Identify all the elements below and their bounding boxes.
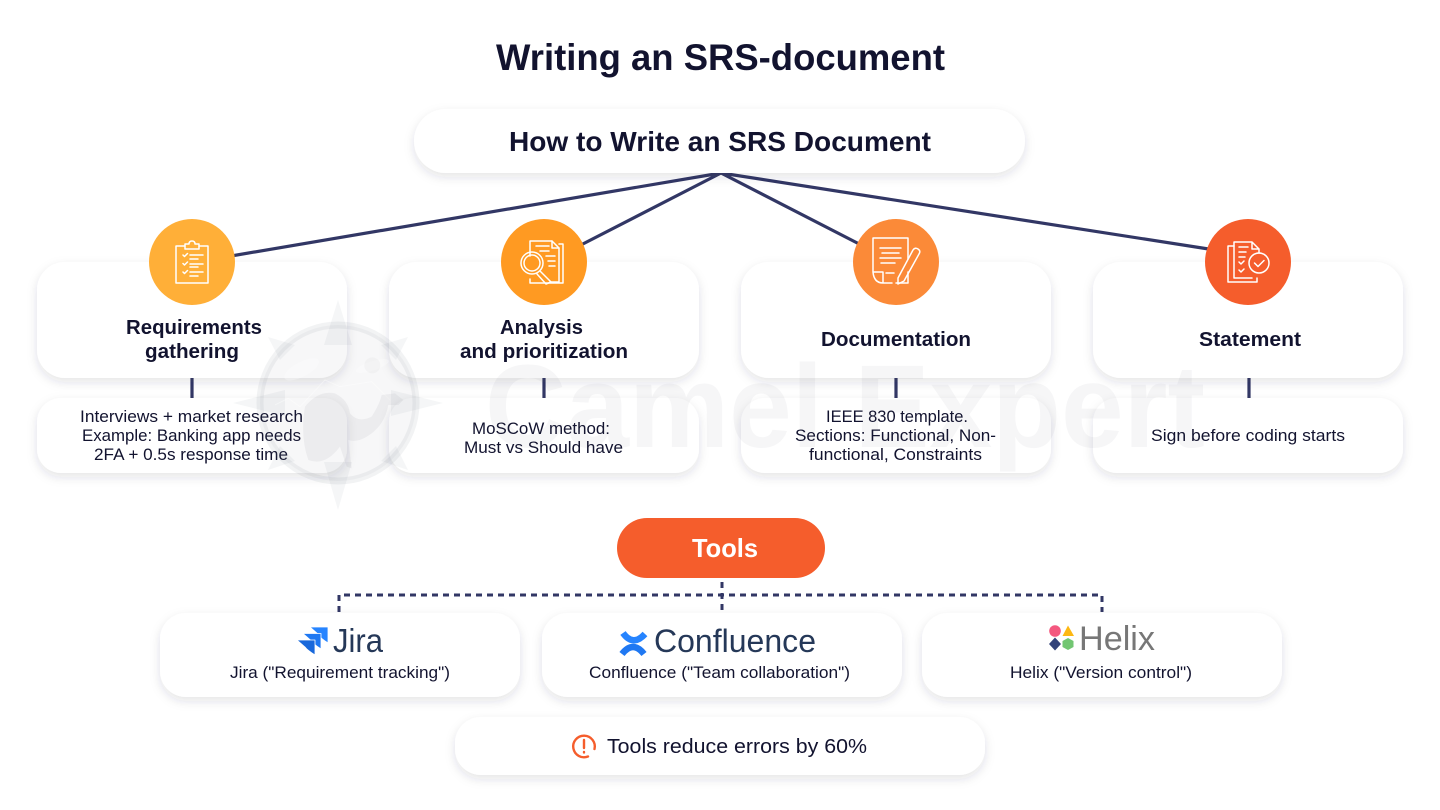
heading: requirements gathering: gathering [145, 341, 239, 363]
icon: confluence logo [622, 633, 645, 654]
callout text: Tools reduce errors by 60% [607, 736, 867, 758]
tools pill: Tools [692, 533, 758, 563]
watermark: compass emblem [233, 300, 443, 510]
connector lines from main heading to steps [225, 173, 1215, 257]
text: requirements details: 2FA + 0.5s response time [94, 446, 288, 464]
text: confluence caption: Confluence ("Team collaboration") [589, 664, 850, 682]
text: helix caption: Helix ("Version control") [1010, 664, 1192, 682]
heading: analysis and prioritization: Analysis [500, 317, 583, 339]
heading: analysis and prioritization [460, 317, 628, 363]
heading: requirements gathering: Requirements [126, 317, 262, 339]
text: requirements details: Interviews + market research [80, 408, 303, 426]
tools pill [617, 518, 825, 578]
text: jira caption: Jira ("Requirement tracking") [230, 664, 450, 682]
icon: signed document [1205, 219, 1291, 305]
text: requirements details: Example: Banking app needs [82, 427, 301, 445]
text: requirements details [80, 408, 303, 464]
icon: document with pencil [853, 219, 939, 305]
panel: analysis and prioritization [389, 219, 699, 473]
main heading pill [414, 109, 1025, 173]
main heading pill: How to Write an SRS Document [509, 126, 931, 157]
icon: jira logo [297, 627, 328, 655]
text: analysis details: Must vs Should have [464, 439, 623, 457]
icon: alert [573, 736, 595, 757]
callout [455, 717, 985, 775]
watermark [233, 300, 1205, 510]
text: documentation details: IEEE 830 template. [826, 408, 968, 426]
step connectors [192, 376, 1249, 400]
logo text: confluence: Confluence [654, 623, 816, 659]
panel: documentation [741, 219, 1051, 473]
heading: requirements gathering [126, 317, 262, 363]
dashed tool connectors [339, 582, 1102, 612]
icon: document with magnifier [501, 219, 587, 305]
text: documentation details: functional, Constraints [809, 446, 982, 464]
icon: helix logo [1049, 625, 1074, 650]
text: documentation details [795, 408, 996, 464]
logo text: jira: Jira [333, 622, 384, 659]
text: statement details: Sign before coding starts [1151, 427, 1345, 445]
logo text: helix: Helix [1079, 620, 1155, 658]
heading: analysis and prioritization: and prioritization [460, 341, 628, 363]
panel: statement [1093, 219, 1403, 473]
panel: requirements gathering [37, 219, 347, 473]
title: Writing an SRS-document [496, 37, 945, 78]
watermark: camel and scenery [275, 354, 403, 468]
panel: confluence [542, 613, 902, 697]
heading: statement: Statement [1199, 329, 1301, 351]
heading: documentation: Documentation [821, 329, 971, 351]
text: documentation details: Sections: Functional, Non- [795, 427, 996, 445]
panel: jira [160, 613, 520, 697]
text: analysis details: MoSCoW method: [472, 420, 610, 438]
watermark: wordmark: Camel Expert [485, 341, 1205, 473]
text: analysis details [464, 420, 623, 457]
panel: helix [922, 613, 1282, 697]
icon: clipboard checklist [149, 219, 235, 305]
